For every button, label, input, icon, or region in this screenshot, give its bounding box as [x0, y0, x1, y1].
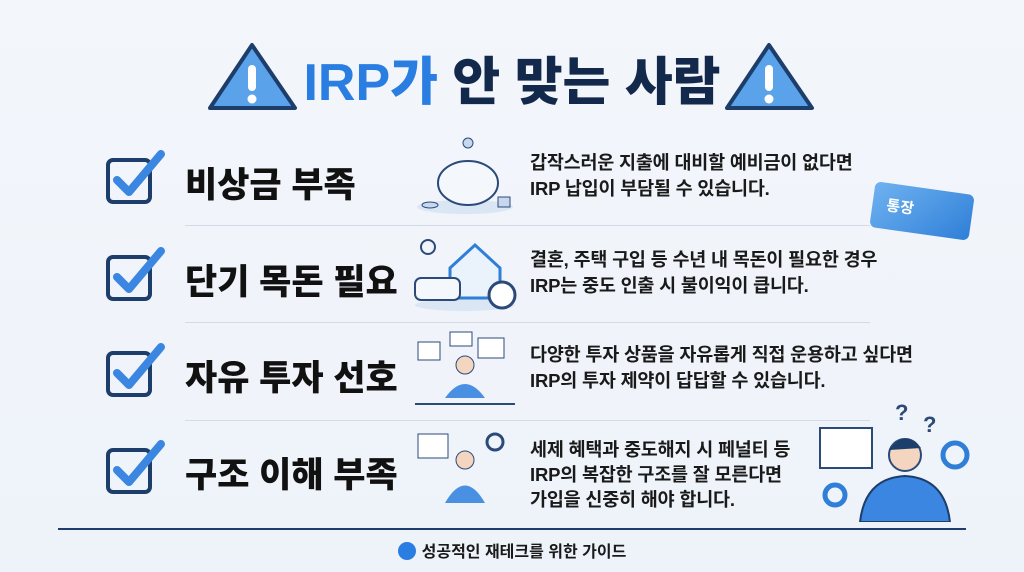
description: [530, 249, 877, 296]
icon: thinking man: ?: [895, 400, 908, 425]
icon: passbook: 통장: [885, 197, 915, 218]
icon: confused woman: [418, 432, 504, 503]
heading: 비상금 부족: [185, 166, 356, 205]
description: 세제 혜택과 중도해지 시 페널티 등: [530, 439, 790, 460]
description: IRP의 복잡한 구조를 잘 모른다면: [530, 464, 782, 485]
description: 갑작스러운 지출에 대비할 예비금이 없다면: [530, 152, 853, 173]
description: [530, 439, 790, 510]
description: IRP는 중도 인출 시 불이익이 큽니다.: [530, 275, 809, 296]
description: IRP 납입이 부담될 수 있습니다.: [530, 178, 770, 199]
icon: thinking man: [819, 400, 970, 522]
icon: warning right: [725, 42, 814, 110]
row 1: [106, 138, 853, 214]
heading: 구조 이해 부족: [185, 456, 398, 495]
description: 결혼, 주택 구입 등 수년 내 목돈이 필요한 경우: [530, 249, 877, 270]
description: 다양한 투자 상품을 자유롭게 직접 운용하고 싶다면: [530, 344, 913, 365]
checkbox: [106, 343, 165, 397]
heading: 자유 투자 선호: [185, 359, 398, 398]
icon: piggy bank: [417, 138, 513, 214]
checkbox: [106, 247, 165, 301]
description: [530, 152, 853, 199]
icon: passbook: [869, 181, 975, 241]
description: 가입을 신중히 해야 합니다.: [530, 489, 735, 510]
checkbox: [106, 150, 165, 204]
description: [530, 344, 913, 391]
row 2: [106, 239, 877, 311]
footer: 성공적인 재테크를 위한 가이드: [422, 544, 626, 561]
icon: house car clock: [414, 239, 516, 311]
description: IRP의 투자 제약이 답답할 수 있습니다.: [530, 370, 825, 391]
icon: investor: [415, 332, 515, 405]
title: IRP가 안 맞는 사람: [303, 54, 721, 112]
icon: thinking man: ?: [923, 412, 936, 437]
row 3: [106, 332, 913, 405]
row 4: [106, 432, 790, 510]
checkbox: [106, 440, 165, 494]
icon: warning left: [208, 42, 298, 110]
heading: 단기 목돈 필요: [185, 263, 398, 302]
